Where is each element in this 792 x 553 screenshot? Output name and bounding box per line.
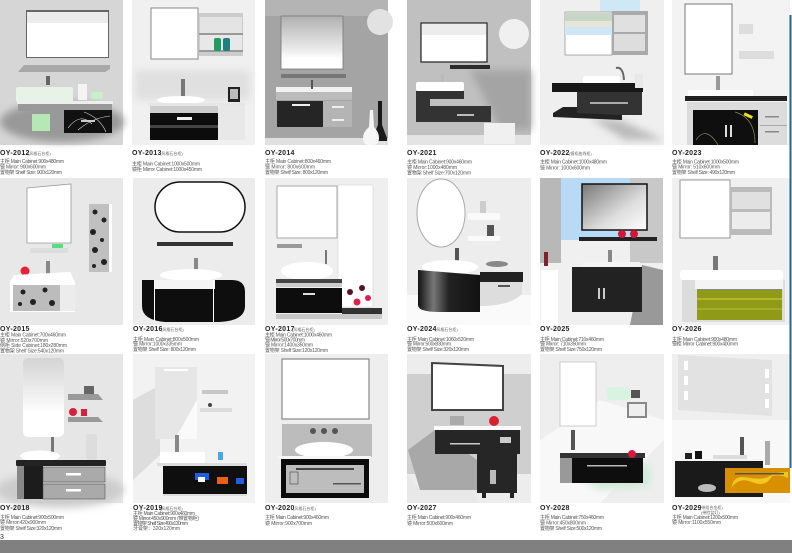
- faucet: [441, 74, 444, 82]
- small shelf: [277, 244, 302, 248]
- teal bottle: [223, 38, 230, 51]
- product: OY-2024: [407, 178, 531, 353]
- product: OY-2019: [133, 354, 255, 532]
- bottom band: [0, 540, 792, 553]
- photo: OY-2021: [407, 0, 531, 145]
- caption: OY-2013: (风格石台柜): [160, 150, 183, 156]
- countertop: [434, 426, 521, 430]
- product: OY-2014: [265, 0, 393, 176]
- caption: OY-2015: 主柜 Main Cabinet:700x460mm: [0, 332, 66, 338]
- product: OY-2029: [672, 325, 792, 526]
- caption: OY-2029: OY-2029: [672, 505, 702, 512]
- caption: OY-2025: OY-2025: [540, 326, 570, 333]
- mirror: [560, 362, 596, 426]
- cabinet: [276, 283, 382, 319]
- basin: [422, 260, 478, 274]
- photo: OY-2028: [540, 354, 664, 503]
- faucet: [46, 261, 50, 276]
- caption: OY-2016: (风格石台柜): [161, 326, 184, 332]
- caption: OY-2026: 镜柜 Mirror Cabinet:900x400mm: [672, 340, 738, 348]
- product: OY-2022: [540, 0, 664, 172]
- countertop: [16, 460, 106, 466]
- faucet: [194, 258, 198, 273]
- caption: OY-2014: OY-2014: [265, 150, 295, 157]
- cabinet: [418, 270, 523, 312]
- picture frame: [228, 87, 240, 102]
- caption: OY-2018: [0, 505, 64, 532]
- faucet: [311, 80, 313, 89]
- product: OY-2012: [0, 0, 124, 176]
- mirror: [432, 363, 503, 410]
- photo: OY-2023: [672, 0, 792, 150]
- cabinet door: [64, 110, 112, 133]
- caption: OY-2017: (风格石台柜): [292, 326, 315, 332]
- countertop: [17, 101, 113, 104]
- mirror: [155, 367, 197, 439]
- caption: OY-2021: 镜 Mirror:1000x480mm: [407, 164, 457, 171]
- cube shelf: [627, 390, 647, 418]
- caption: OY-2013: 镜柜 Mirror Cabinet:1000x450mm: [132, 166, 202, 173]
- drawers: [323, 101, 352, 127]
- basin: [20, 450, 60, 462]
- caption: OY-2017: [265, 326, 332, 354]
- wine glasses: [347, 285, 371, 306]
- caption: OY-2014: 置物架 Shelf Size: 800x120mm: [265, 169, 328, 176]
- small shelf: [30, 244, 68, 253]
- caption: OY-2017: 镜 Mirror:1400x350mm: [265, 342, 313, 348]
- caption: OY-2026: [672, 326, 738, 348]
- caption: OY-2025: 置物架 Shelf Size:750x120mm: [540, 346, 602, 353]
- cabinet: [682, 280, 785, 322]
- towel: [32, 114, 50, 131]
- side stripe: [790, 325, 792, 468]
- mirror cabinet: [565, 11, 648, 55]
- caption: OY-2026: 主柜 Main Cabinet:900x480mm: [672, 336, 737, 343]
- caption: OY-2019: 主柜 Main Cabinet:900x460mm: [133, 510, 195, 517]
- black vase: [375, 101, 387, 141]
- mirror: [282, 359, 369, 419]
- caption: OY-2028: [540, 505, 604, 532]
- caption: OY-2021: [407, 150, 472, 176]
- photo: OY-2022: [540, 0, 664, 145]
- cabinet door: [277, 101, 323, 127]
- caption: OY-2012: 主柜 Main Cabinet 900x480mm: [0, 158, 64, 165]
- mirror: [421, 23, 487, 62]
- apples: [618, 230, 638, 238]
- photo: OY-2024: [407, 178, 531, 325]
- caption: OY-2017: 主柜 Main Cabinet:1000x460mm: [265, 332, 332, 338]
- photo: OY-2026: [672, 150, 792, 325]
- product: OY-2020: [265, 354, 388, 527]
- caption: OY-2012: (风格石台柜): [28, 150, 51, 156]
- basin: [160, 269, 222, 281]
- wall shelves: [739, 24, 774, 59]
- caption: OY-2018: 主柜 Main Cabinet:900x500mm: [0, 514, 64, 521]
- caption: OY-2026: OY-2026: [672, 326, 702, 333]
- caption: OY-2015: 侧柜 Side Cabinet:180x280mm: [0, 342, 67, 349]
- countertop: [278, 456, 371, 459]
- basin: [416, 82, 464, 91]
- caption: OY-2015: 置物架 Shelf Size:540x120mm: [0, 348, 64, 354]
- caption: OY-2029: 主柜 Main Cabinet:1200x500mm: [672, 514, 738, 521]
- caption: OY-2019: 置物架 Shelf Size:490x130mm: [133, 520, 188, 527]
- caption: OY-2014: 主柜 Main Cabinet:800x460mm: [265, 158, 331, 165]
- faucet: [325, 250, 327, 264]
- soap dish: [91, 92, 103, 99]
- caption: OY-2016: 主柜 Main Cabinet:800x500mm: [133, 336, 199, 343]
- countertop: [149, 103, 245, 106]
- faucet: [716, 76, 720, 92]
- basin: [713, 455, 747, 461]
- side stripe: [790, 150, 792, 325]
- side table: [541, 252, 558, 325]
- tall cabinet: [338, 185, 373, 307]
- basin: [16, 87, 73, 102]
- side stripe: [790, 15, 792, 150]
- caption: OY-2012: 镜 Mirror: 900x600mm: [0, 164, 46, 170]
- bottle: [635, 74, 643, 88]
- bottles: [78, 84, 87, 100]
- white vase: [363, 110, 379, 145]
- caption: OY-2029: [672, 504, 738, 526]
- caption: OY-2027: [407, 505, 471, 527]
- mirror: [23, 358, 64, 437]
- shelf cabinet: [199, 13, 243, 56]
- caption: OY-2025: 镜 Mirror: 710x350mm: [540, 340, 586, 348]
- cabinet: [150, 106, 245, 140]
- photo: OY-2015: [0, 178, 123, 325]
- caption: OY-2023: OY-2023: [672, 150, 702, 157]
- caption: OY-2019: [133, 505, 199, 532]
- product: OY-2028: [540, 354, 664, 532]
- pendant orb: [367, 9, 393, 35]
- mirror: [281, 16, 343, 69]
- faucet: [455, 248, 459, 262]
- basin: [688, 90, 753, 100]
- caption: OY-2012: 置物架 Shelf Size: 900x120mm: [0, 169, 62, 176]
- product: OY-2016: [133, 178, 255, 353]
- caption: OY-2028: 置物架 Shelf Size:500x120mm: [540, 525, 602, 532]
- red apple and cup: [69, 408, 87, 416]
- caption: OY-2024: 镜 Mirror:500x830mm: [407, 340, 451, 348]
- apple: [20, 266, 30, 276]
- caption: OY-2019: OY-2019: [133, 505, 163, 512]
- faucet: [46, 76, 50, 85]
- shelves: [468, 201, 500, 241]
- cabinet: [577, 92, 642, 115]
- photo: OY-2025: [540, 178, 663, 325]
- bottle: [218, 452, 223, 460]
- caption: OY-2020: OY-2020: [265, 505, 295, 512]
- caption: OY-2015: 镜 Mirror:520x700mm: [0, 337, 48, 344]
- shelves: [200, 390, 232, 412]
- caption: OY-2023: 镜 Mirror: 510x600mm: [672, 164, 720, 170]
- countertop: [560, 453, 645, 458]
- caption: OY-2023: [672, 150, 739, 176]
- countertop: [276, 279, 342, 283]
- basket: [484, 123, 515, 144]
- faucet: [608, 250, 612, 262]
- wall faucet: [310, 428, 338, 434]
- cabinet: [416, 91, 491, 122]
- caption: OY-2022: OY-2022: [540, 150, 570, 157]
- caption: OY-2029: (带脸盆灯): [701, 509, 720, 515]
- caption: OY-2018: 镜 Mirror:420x900mm: [0, 519, 46, 526]
- round mirror: [417, 179, 465, 247]
- caption: OY-2019: (风格石台柜): [160, 505, 183, 511]
- countertop: [685, 96, 787, 101]
- product: OY-2017: [265, 178, 388, 354]
- caption: OY-2019: 牙膏架：320x120mm: [133, 525, 180, 532]
- caption: OY-2023: 主柜 Main Cabinet 1000x500mm: [672, 158, 739, 166]
- basin: [160, 452, 205, 465]
- green patch: [607, 387, 630, 400]
- product: OY-2018: [0, 354, 124, 532]
- mirror: [277, 186, 337, 238]
- faucet: [740, 437, 744, 455]
- caption: OY-2020: 主柜 Main Cabinet:900x460mm: [265, 514, 329, 521]
- LED mirror: [678, 355, 772, 416]
- caption: OY-2025: 主柜 Main Cabinet:710x460mm: [540, 336, 604, 343]
- product: OY-2015: [0, 178, 123, 354]
- basin: [281, 262, 333, 280]
- lower shelf: [553, 107, 622, 120]
- caption: OY-2021: 主柜 Main Cabinet:900x460mm: [407, 158, 472, 166]
- apple: [489, 416, 499, 426]
- caption: OY-2029: (带组合金柜): [700, 504, 723, 510]
- caption: OY-2018: 置物架 Shelf Size:320x120mm: [0, 525, 62, 532]
- caption: OY-2029: 镜 Mirror:1100x550mm: [672, 519, 721, 526]
- faucet: [181, 79, 185, 97]
- mirror: [685, 4, 732, 74]
- shelf: [579, 237, 657, 241]
- figurine: [86, 434, 97, 460]
- photo: OY-2018: [0, 354, 124, 508]
- caption: OY-2024: OY-2024: [407, 326, 437, 333]
- product: OY-2021: [407, 0, 531, 176]
- shelf cabinet: [730, 187, 772, 235]
- caption: OY-2024: [407, 326, 474, 353]
- cabinet: [142, 280, 245, 322]
- caption: OY-2012: [0, 150, 64, 176]
- product: OY-2026: [672, 150, 792, 348]
- caption: OY-2016: [133, 326, 199, 353]
- faucet: [175, 435, 179, 452]
- figurine: [765, 441, 770, 465]
- backsplash: [282, 424, 372, 457]
- oval mirror: [155, 182, 245, 232]
- basin: [157, 96, 205, 104]
- photo: OY-2027: [407, 354, 531, 503]
- countertop: [276, 87, 352, 100]
- photo: OY-2016: [133, 178, 255, 325]
- faucet: [616, 68, 624, 80]
- caption: OY-2013: 主柜 Main Cabinet:1000x500mm: [132, 160, 200, 168]
- basin: [10, 272, 75, 282]
- product: OY-2023: [672, 0, 792, 176]
- caption: OY-2028: OY-2028: [540, 505, 570, 512]
- product: OY-2027: [407, 354, 531, 527]
- countertop: [583, 262, 640, 267]
- cabinet: [157, 463, 247, 496]
- basin: [680, 270, 783, 280]
- caption: OY-2027: 主柜 Main Cabinet:900x460mm: [407, 514, 471, 521]
- caption: OY-2018: OY-2018: [0, 505, 30, 512]
- caption: OY-2027: 镜 Mirror:500x600mm: [407, 520, 453, 527]
- faucet: [450, 416, 464, 425]
- photo: OY-2014: [265, 0, 393, 145]
- caption: OY-2028: 主柜 Main Cabinet:750x460mm: [540, 514, 604, 521]
- caption: OY-2025: [540, 326, 604, 353]
- caption: OY-2014: 镜 Mirror: 800x600mm: [265, 164, 315, 170]
- apple: [628, 450, 636, 458]
- caption: OY-2012: OY-2012: [0, 150, 30, 157]
- shelves: [68, 386, 103, 422]
- pendant orb: [499, 19, 529, 49]
- photo: OY-2019: [133, 354, 255, 503]
- photo: OY-2013: [132, 0, 255, 145]
- caption: OY-2019: 镜 Mirror:450x900mm (带置物柜): [133, 515, 199, 522]
- shelf: [157, 242, 233, 246]
- shelf: [18, 65, 110, 72]
- cabinet: [687, 102, 787, 145]
- cabinet: [560, 458, 643, 483]
- photo: OY-2020: [265, 354, 388, 503]
- cabinet: [435, 430, 520, 454]
- green bottle: [214, 38, 221, 51]
- faucet: [571, 430, 575, 450]
- cabinet: [572, 267, 642, 312]
- page number: 3: [0, 534, 4, 541]
- cabinet: [675, 461, 763, 497]
- caption: OY-2020: 镜 Mirror:900x700mm: [265, 520, 312, 527]
- shelf: [281, 74, 346, 78]
- caption: OY-2013: OY-2013: [132, 150, 162, 157]
- caption: OY-2020: (风格石台柜): [293, 505, 316, 511]
- mirror: [26, 10, 109, 58]
- countertop towel: [486, 261, 508, 267]
- cabinet: [10, 282, 75, 312]
- caption: OY-2028: 镜 Mirror:450x800mm: [540, 520, 586, 526]
- caption: OY-2015: OY-2015: [0, 326, 30, 333]
- countertop: [675, 459, 763, 462]
- caption: OY-2015: [0, 326, 67, 354]
- caption: OY-2022: (镜柜曲线柜): [569, 150, 592, 156]
- shelf: [450, 65, 490, 69]
- lower cabinet: [477, 454, 517, 498]
- product: OY-2013: [132, 0, 255, 173]
- basin: [295, 442, 353, 458]
- product: OY-2025: [540, 178, 663, 353]
- cabinet: [281, 459, 369, 498]
- caption: OY-2021: 置物架 Shelf Size:700x120mm: [407, 170, 471, 176]
- caption: OY-2023: 置物架 Shelf Size: 490x120mm: [672, 169, 735, 176]
- caption: OY-2024: (风格石台柜): [435, 326, 458, 332]
- countertop: [552, 83, 643, 92]
- caption: OY-2020: [265, 505, 329, 527]
- mirror: [27, 184, 71, 243]
- caption: OY-2016: 镜 Mirror:1000x335mm: [133, 340, 182, 348]
- caption: OY-2022: 镜 Mirror: 1000x600mm: [540, 164, 590, 172]
- faucet: [713, 256, 718, 274]
- caption: OY-2022: [540, 150, 607, 172]
- caption: OY-2016: OY-2016: [133, 326, 163, 333]
- caption: OY-2013: [132, 150, 202, 173]
- countertop items: [685, 451, 702, 460]
- caption: OY-2017: OY-2017: [265, 326, 295, 333]
- caption: OY-2027: OY-2027: [407, 505, 437, 512]
- caption: OY-2016: 置物架 Shelf Size: 800x120mm: [133, 346, 196, 353]
- mirror: [151, 8, 198, 59]
- mirror: [582, 184, 647, 230]
- photo: OY-2017: [265, 178, 388, 325]
- photo: OY-2029: [672, 325, 792, 503]
- orange drawer: [725, 468, 790, 493]
- caption: OY-2024: 主柜 Main Cabinet:1060x520mm: [407, 336, 474, 343]
- caption: OY-2017: 置物架 Shelf Size:120x120mm: [265, 347, 328, 354]
- caption: OY-2017: 镜 Mirror:500x700mm: [265, 336, 305, 344]
- basin: [583, 76, 620, 84]
- caption: OY-2014: [265, 150, 331, 176]
- mirror: [680, 180, 730, 238]
- faucet: [51, 437, 54, 452]
- photo: OY-2012: [0, 0, 124, 145]
- caption: OY-2024: 置物架 Shelf Size:320x120mm: [407, 346, 469, 353]
- cabinet: [17, 466, 105, 499]
- caption: OY-2021: OY-2021: [407, 150, 437, 157]
- tall patterned cabinet: [89, 204, 112, 272]
- caption: OY-2022: 主柜 Main Cabinet:1000x480mm: [540, 158, 607, 166]
